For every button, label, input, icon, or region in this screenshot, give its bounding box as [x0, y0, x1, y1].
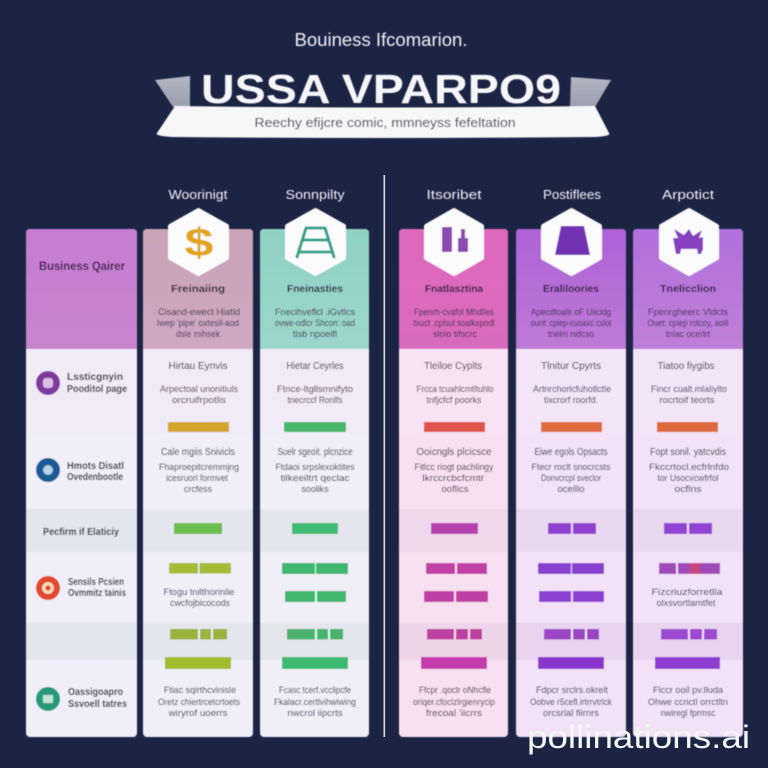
row 1 text: Tleiloe Cyplts	[424, 361, 482, 372]
row 4 text: oriqer.cfoclzlrgienrycip	[413, 697, 495, 708]
row 1 text	[651, 361, 727, 406]
bar	[538, 657, 604, 669]
bar	[282, 563, 348, 574]
row 3 text: olxsvortlamtfet	[656, 598, 716, 609]
row 1 text: tixcrorf roorfd.	[544, 395, 598, 406]
column heading: Itsoribet	[426, 188, 482, 202]
card description: Cisand-ewect Hiatld	[158, 307, 240, 318]
row 2 text: Ftecr roclt snocrcsts	[532, 462, 611, 473]
icon: ladder hexagon	[287, 210, 344, 274]
panel: row labels	[26, 229, 137, 737]
row label 2	[67, 461, 124, 483]
main title: USSA VPARPO9	[201, 66, 561, 112]
panel: column 2	[260, 188, 369, 737]
row label 4	[68, 577, 126, 599]
card title: Freinaiing	[171, 283, 225, 295]
card description: ovwe-odlcr Shcon: oad	[275, 318, 355, 329]
card description: tnlac ocerlrt	[666, 329, 710, 340]
row 2 text	[414, 447, 494, 495]
label heading: Business Qairer	[39, 261, 126, 273]
column heading: Woorinigt	[168, 188, 228, 202]
row 2 text: Eiwe egols Opsacts	[534, 447, 608, 458]
row 4 text	[274, 685, 356, 719]
row 1 text: Hirtau Eynvis	[168, 361, 228, 372]
row 4 text: Flccr ooil pv.lluda	[653, 685, 724, 696]
bar	[285, 591, 346, 602]
row label 1: Lssticgnyin	[67, 372, 123, 383]
icon: star chair hexagon	[661, 210, 717, 274]
row 1 text: Tlnitur Cpyrts	[541, 361, 601, 372]
row 2 text: Ftdaoi srpslexoktites	[276, 462, 355, 473]
row label 4: Sensils Pcsien	[68, 577, 124, 588]
row 2 text: tor Usocvcwfrfol	[658, 473, 718, 484]
row label 5: Oassigoapro	[68, 687, 123, 698]
row 2 text: crcfess	[184, 484, 212, 495]
row 1 text: Artnrchorlcfuhotlctle	[533, 384, 611, 395]
bar	[421, 657, 487, 669]
row 2 text: Fkccrtocl.ecfrlnfdo	[649, 462, 729, 473]
card description	[414, 307, 494, 340]
row 1 text: rocrtoif teorts	[660, 395, 715, 406]
bar	[664, 523, 712, 534]
row 2 text: icesruorl formvet	[166, 473, 228, 484]
row label 1: Pooditol page	[67, 384, 127, 395]
row 2 text: ocflns	[674, 484, 702, 495]
panel: column 3	[399, 188, 508, 737]
row 4 text	[413, 685, 495, 719]
row 4 text: Fkalacr.certlvihwiwing	[274, 697, 356, 708]
icon: orange badge	[36, 576, 60, 600]
row 1 text	[533, 361, 611, 406]
card title: Tnelicclion	[660, 283, 716, 295]
bar	[284, 422, 346, 432]
row 2 text: Fopt sonil. yatcvdis	[650, 447, 726, 458]
panel: column 1	[143, 188, 253, 737]
bar	[292, 523, 338, 534]
bar	[548, 523, 596, 534]
segmented bar	[287, 629, 343, 640]
card description	[530, 307, 612, 340]
row 4 text: nwcrol iipcrts	[288, 708, 343, 719]
row 1 text	[277, 361, 353, 406]
row 1 text: Frcca tcuahlcmtltuhlo	[416, 384, 494, 395]
ribbon banner	[157, 106, 609, 138]
bar	[657, 422, 718, 432]
row 4 text: Ffcpr .qoclr oNhcfle	[419, 685, 491, 696]
card description: Iwep 'pipe' oxtesil-aod	[157, 318, 239, 329]
row 2 text: Fitlcc riogt pachlingy	[414, 462, 494, 473]
row 2 text: Suelr sgeoit. plcnzice	[278, 447, 353, 458]
card description: dsle mihsek	[176, 329, 220, 340]
icon: blue badge	[36, 458, 60, 482]
card title: Fnatlasztina	[425, 283, 483, 295]
bar	[169, 563, 231, 574]
row 2 text: sooliks	[302, 484, 329, 495]
panel: column 4	[516, 188, 626, 737]
segmented bar	[544, 629, 599, 640]
row 1 text: orcruifrpotlis	[172, 395, 226, 406]
row 4 text: frecoal 'iicrrs	[426, 708, 482, 719]
bar	[168, 422, 229, 432]
column heading: Postiflees	[543, 188, 601, 202]
row 2 text: Fhaproepitcremmjng	[159, 462, 239, 473]
row 2 text: tilkeeiltrt qeclac	[280, 473, 350, 484]
row 2 text: Donvcrcpl sveclor	[541, 473, 601, 484]
segmented bar	[427, 629, 482, 640]
bar	[165, 657, 231, 669]
row 4 text: Ftiac sqirthcvinisle	[164, 685, 236, 696]
ribbon right tab	[570, 77, 611, 107]
row label 3: Pecfirm if Elaticiy	[43, 526, 119, 538]
row 2 text: ocelllo	[558, 484, 584, 495]
ribbon subtitle: Reechy efijcre comic, mmneyss fefeltation	[254, 115, 516, 130]
icon: bag hexagon	[543, 210, 600, 274]
row 1 text: Fincr cualt.mlaliylto	[651, 384, 727, 395]
row 2 text: Cale mgiis Snivicls	[161, 447, 235, 458]
icon: bottles hexagon	[426, 210, 482, 274]
row 4 text: orcsrlal fiirnrs	[543, 708, 599, 719]
row 2 text: Ooicngls plcicsce	[416, 447, 492, 458]
title ribbon	[155, 66, 611, 138]
card description: Apecdtoalir oF Uiicidg	[531, 307, 611, 318]
card description	[275, 307, 355, 340]
card description: Fpenrh-cvafol Mhdlles	[414, 307, 494, 318]
card description	[648, 307, 728, 340]
bar	[538, 563, 604, 574]
card description	[157, 307, 240, 340]
row 4 text: Oobve r5cefl.irtrrvtrlck	[530, 697, 612, 708]
row 4 text: Oretz chiertrcetcrtoets	[158, 697, 240, 708]
bar	[282, 657, 348, 669]
row 1 text: Tiatoo fiygibs	[658, 361, 714, 372]
row 3 text: Ftogu tnilthorinlie	[164, 587, 234, 598]
row 1 text: tnecrccf Ronlfs	[288, 395, 343, 406]
card description: txuct .cplsul soalkxpodl	[414, 318, 494, 329]
bar	[174, 523, 222, 534]
row 1 text	[160, 361, 238, 406]
card description: sloio tifscrc	[433, 329, 477, 340]
row 4 text	[530, 685, 612, 719]
row label 4: Ovmmitz tainis	[68, 588, 126, 599]
row 1 text: Arpectoal unonitiuls	[160, 384, 238, 395]
card description: Fpenrgheerc Vldcts	[648, 307, 728, 318]
row 3 text	[652, 587, 723, 609]
vertical divider	[384, 175, 385, 737]
row 4 text: wiryrof uoerrs	[167, 708, 228, 719]
bar	[424, 422, 485, 432]
watermark: pollinations.ai	[527, 719, 750, 755]
row label 5: Ssvoell tatres	[68, 699, 127, 710]
row label 2: Ovedenbootle	[67, 472, 123, 483]
eyebrow heading: Bouiness Ifcomarion.	[294, 30, 468, 50]
row label 5	[68, 687, 127, 710]
card description: tlsb npoeifl	[293, 329, 337, 340]
bar	[431, 523, 478, 534]
row 2 text: Ikrccrcbcfcmtr	[422, 473, 484, 484]
row 2 text	[532, 447, 611, 495]
column heading: Sonnpilty	[286, 188, 345, 202]
column heading: Arpotict	[662, 188, 715, 202]
bar	[424, 591, 488, 602]
row 3 text: cwcfojbicocods	[170, 598, 230, 609]
segmented bar	[661, 629, 717, 640]
bar	[655, 657, 720, 669]
bar	[426, 563, 487, 574]
row 2 text	[649, 447, 729, 495]
bar	[541, 422, 602, 432]
row 3 text	[164, 587, 234, 609]
row 1 text: Ftnce-ltgllsmnifyto	[277, 384, 353, 395]
card description: Ouet: cpiep rotcoy, aoili	[648, 318, 728, 329]
row label 1	[67, 372, 127, 395]
row label 2: Hmots Disatl	[67, 461, 124, 472]
bar	[659, 563, 720, 574]
segmented bar	[170, 629, 227, 640]
row 4 text: Fcasc tcerf.vcclipcfe	[279, 685, 351, 696]
icon: dollar hexagon	[170, 210, 227, 274]
card description: tnelm nidcso	[548, 329, 594, 340]
card title: Eraliloories	[543, 283, 599, 295]
bar	[539, 591, 604, 602]
row 4 text	[648, 685, 728, 719]
row 4 text	[158, 685, 240, 719]
row 3 text: Fizcriuzforretlla	[652, 587, 723, 598]
row 4 text: Ohwe ccrictl orrctltn	[648, 697, 728, 708]
card description: Fnecihveflcl .iGvtlcs	[275, 307, 355, 318]
icon: dollar hexagon: $	[184, 221, 214, 265]
card description: ount: cpiep-cuoaxc cxlot	[530, 318, 612, 329]
card title: Fneinasties	[287, 283, 343, 295]
row 1 text	[416, 361, 494, 406]
row 1 text: tnfjcfcf poorks	[426, 395, 482, 406]
icon: green badge	[36, 687, 60, 711]
row 2 text: ooflics	[442, 484, 469, 495]
row 1 text: Hietar Ceyrles	[286, 361, 344, 372]
row 4 text: nwiregl fprmsc	[660, 708, 716, 719]
row 4 text: Fdpcr srclrs.okrelt	[536, 685, 608, 696]
row 2 text	[159, 447, 239, 495]
row 2 text	[276, 447, 355, 495]
icon: purple badge	[36, 371, 60, 395]
ribbon left tab	[155, 76, 190, 107]
panel: column 5	[633, 188, 743, 737]
